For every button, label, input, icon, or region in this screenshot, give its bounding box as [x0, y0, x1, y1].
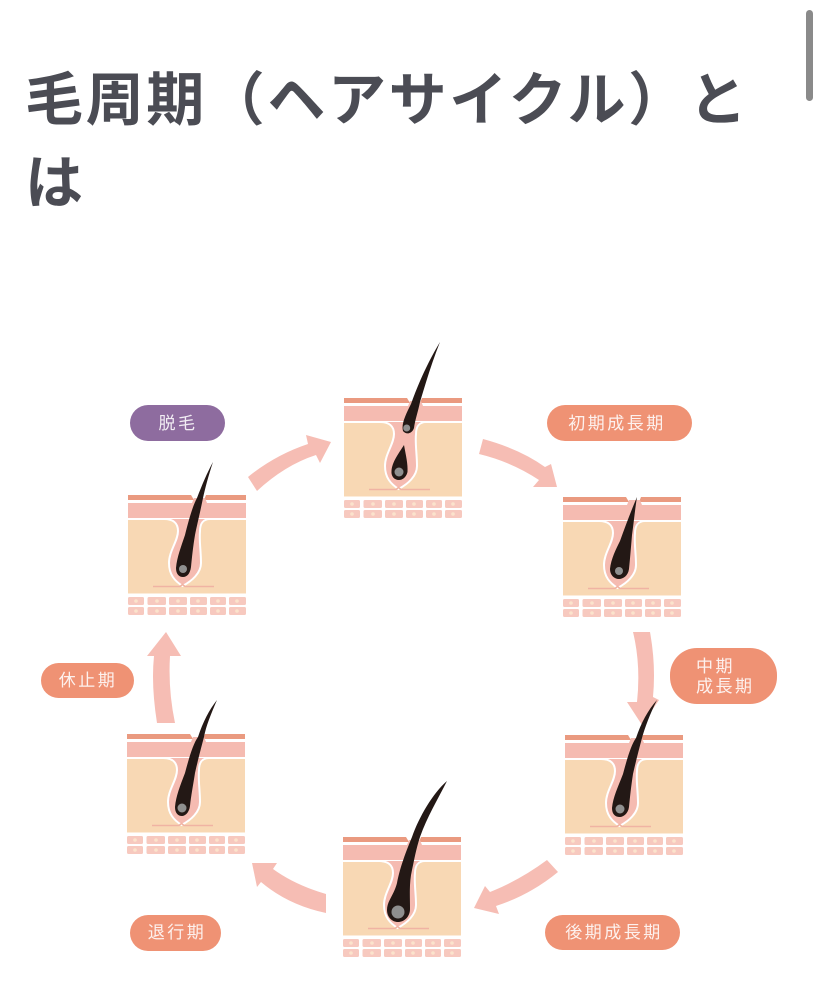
arrow: 退行期 to 休止期 [147, 632, 181, 723]
label: 中期成長期 [670, 648, 777, 704]
skin panel: 脱毛 stage (top) [344, 342, 462, 518]
label: 後期成長期: 後期成長期 [565, 923, 663, 942]
title [25, 68, 749, 216]
arrow: 初期成長期 to 中期成長期 [627, 632, 659, 725]
arrow: 中期成長期 to 後期成長期 [474, 860, 558, 914]
skin panel: 後期成長期 [343, 781, 461, 957]
skin panel: 初期成長期 [563, 497, 681, 617]
label: 初期成長期: 初期成長期 [568, 414, 666, 433]
label: 初期成長期 [547, 405, 692, 441]
label: 休止期: 休止期 [59, 671, 117, 690]
label: 後期成長期 [545, 915, 680, 950]
arrow: top to 初期成長期 [479, 439, 557, 487]
label: 脱毛 [130, 405, 225, 441]
label: 脱毛: 脱毛 [158, 414, 198, 433]
scrollbar [806, 10, 813, 101]
skin panel: 退行期 [127, 700, 245, 854]
label: 中期成長期: 中期 [696, 657, 735, 676]
label: 退行期 [130, 915, 221, 951]
label: 退行期: 退行期 [148, 923, 206, 942]
skin panel: 休止期 [128, 462, 246, 615]
label: 休止期 [41, 663, 134, 698]
old hair [403, 342, 440, 433]
new hair [391, 445, 408, 480]
skin panel: 中期成長期 [565, 700, 683, 855]
title line 1: 毛周期（ヘアサイクル）と [25, 68, 749, 133]
arrow: 後期成長期 to 退行期 [252, 863, 326, 913]
arrow: 脱毛 to top [248, 435, 331, 491]
title line 2: は [25, 151, 86, 216]
label: 中期成長期: 成長期 [696, 677, 754, 696]
